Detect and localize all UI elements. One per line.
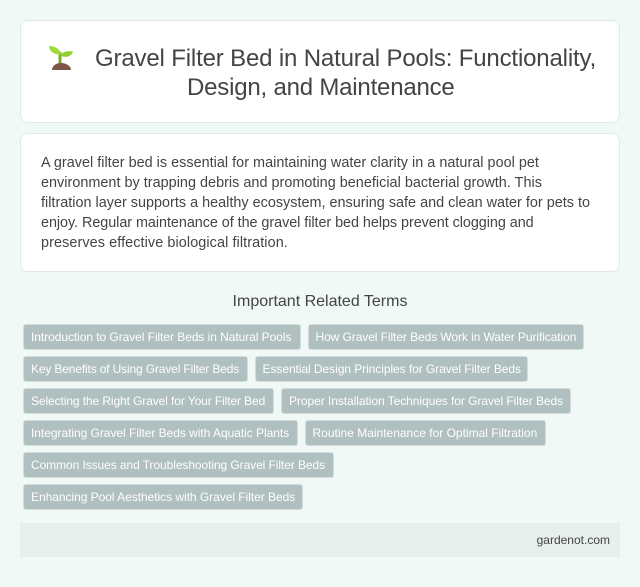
- chip list: related terms: Introduction to Gravel Filter Beds in Natural Pools: [31, 330, 291, 344]
- chip list: related terms: Selecting the Right Gravel for Your Filter Bed: [31, 394, 265, 408]
- chip list: related terms: Enhancing Pool Aesthetics with Gravel Filter Beds: [31, 490, 295, 504]
- heading line 2: Design, and Maintenance: [187, 74, 455, 101]
- chip list: related terms: Key Benefits of Using Gravel Filter Beds: [31, 362, 239, 376]
- text block: intro: A gravel filter bed is essential for maintaining water clarity in a natural pool pet: [41, 155, 539, 171]
- text block: intro: environment by trapping debris and promoting beneficial bacterial growth. This: [41, 175, 542, 191]
- chip list: related terms: [23, 324, 584, 510]
- panel: title card: [20, 20, 620, 123]
- chip list: related terms: Routine Maintenance for Optimal Filtration: [312, 426, 537, 440]
- text block: intro: [41, 155, 590, 251]
- chip list: related terms: Common Issues and Troubleshooting Gravel Filter Beds: [31, 458, 325, 472]
- panel: intro card: [20, 133, 620, 272]
- heading: related terms: Important Related Terms: [233, 293, 407, 310]
- footer bar: [20, 523, 620, 557]
- footer text: gardenot.com: [537, 533, 610, 547]
- chip list: related terms: Proper Installation Techniques for Gravel Filter Beds: [289, 394, 563, 408]
- chip list: related terms: Essential Design Principles for Gravel Filter Beds: [262, 362, 521, 376]
- text block: intro: filtration layer supports a healthy ecosystem, ensuring safe and clean water for pets to: [41, 195, 590, 211]
- chip list: related terms: Integrating Gravel Filter Beds with Aquatic Plants: [31, 426, 289, 440]
- chip list: related terms: How Gravel Filter Beds Work in Water Purification: [316, 330, 576, 344]
- text block: intro: preserves effective biological filtration.: [41, 235, 288, 251]
- text block: intro: enjoy. Regular maintenance of the gravel filter bed helps prevent clogging and: [41, 215, 534, 231]
- heading: Gravel Filter Bed in Natural Pools: Functionality,: [95, 45, 596, 72]
- icon: seedling: [49, 46, 73, 70]
